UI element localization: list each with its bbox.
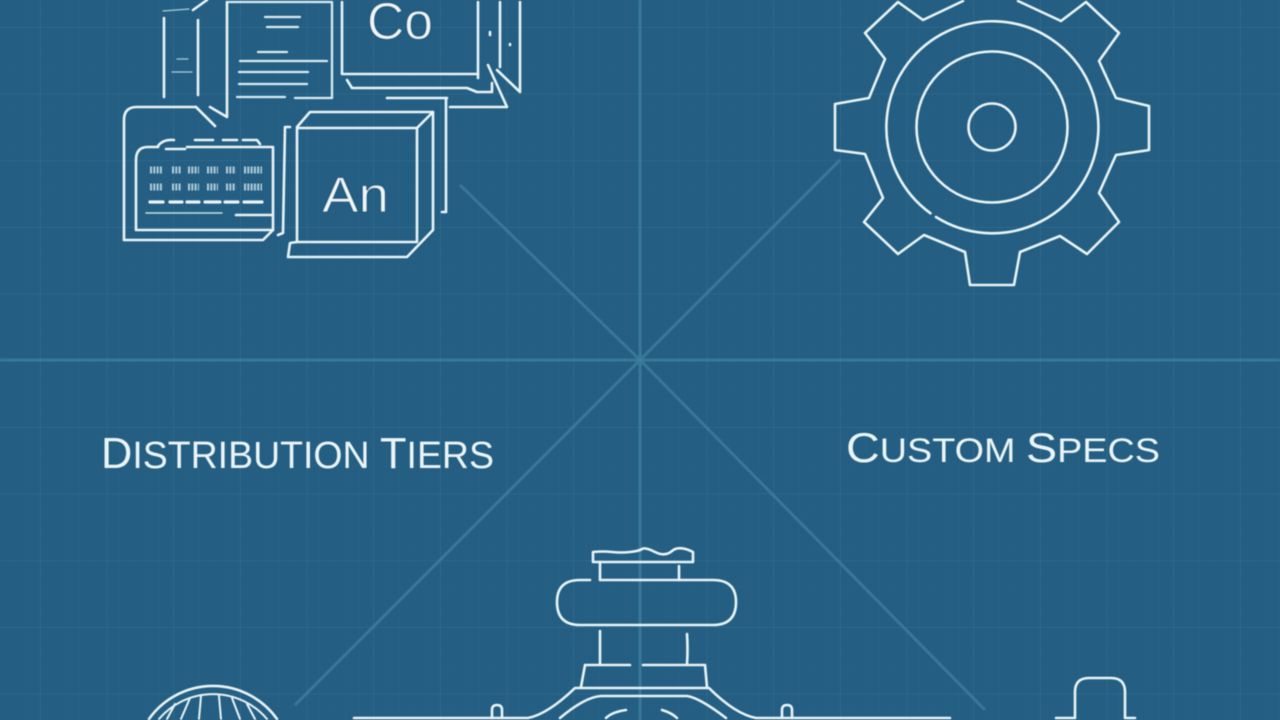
inner arch: [560, 696, 726, 718]
icon: gear: [835, 1, 1149, 285]
label: An: An: [322, 167, 389, 223]
valve cap: [593, 548, 693, 562]
bolts: [492, 705, 502, 718]
handle: [557, 580, 736, 625]
lower neck: [600, 631, 688, 664]
icon: document stack: [124, 0, 520, 257]
folded book: [163, 0, 227, 126]
hub: [968, 104, 1016, 150]
wheel spokes: [167, 696, 255, 719]
inner ring: [916, 52, 1068, 202]
icon: wheel: [149, 686, 277, 719]
box with Co label: [342, 2, 520, 212]
outer ring: [886, 21, 1098, 233]
text document: [229, 2, 332, 98]
heading: Custom Specs: CUSTOM SPECS: [846, 424, 1160, 471]
upper neck: [600, 562, 679, 580]
wheel rim: [149, 686, 277, 719]
valve body: [354, 688, 950, 718]
flange: [581, 665, 707, 687]
icon: side post: [1056, 678, 1135, 718]
box with An label: [288, 112, 433, 257]
icon: valve assembly: [354, 548, 950, 718]
gear outline: [835, 1, 1149, 285]
heading: Distribution Tiers: DISTRIBUTION TIERS: [101, 429, 494, 478]
calendar card: [124, 107, 290, 240]
